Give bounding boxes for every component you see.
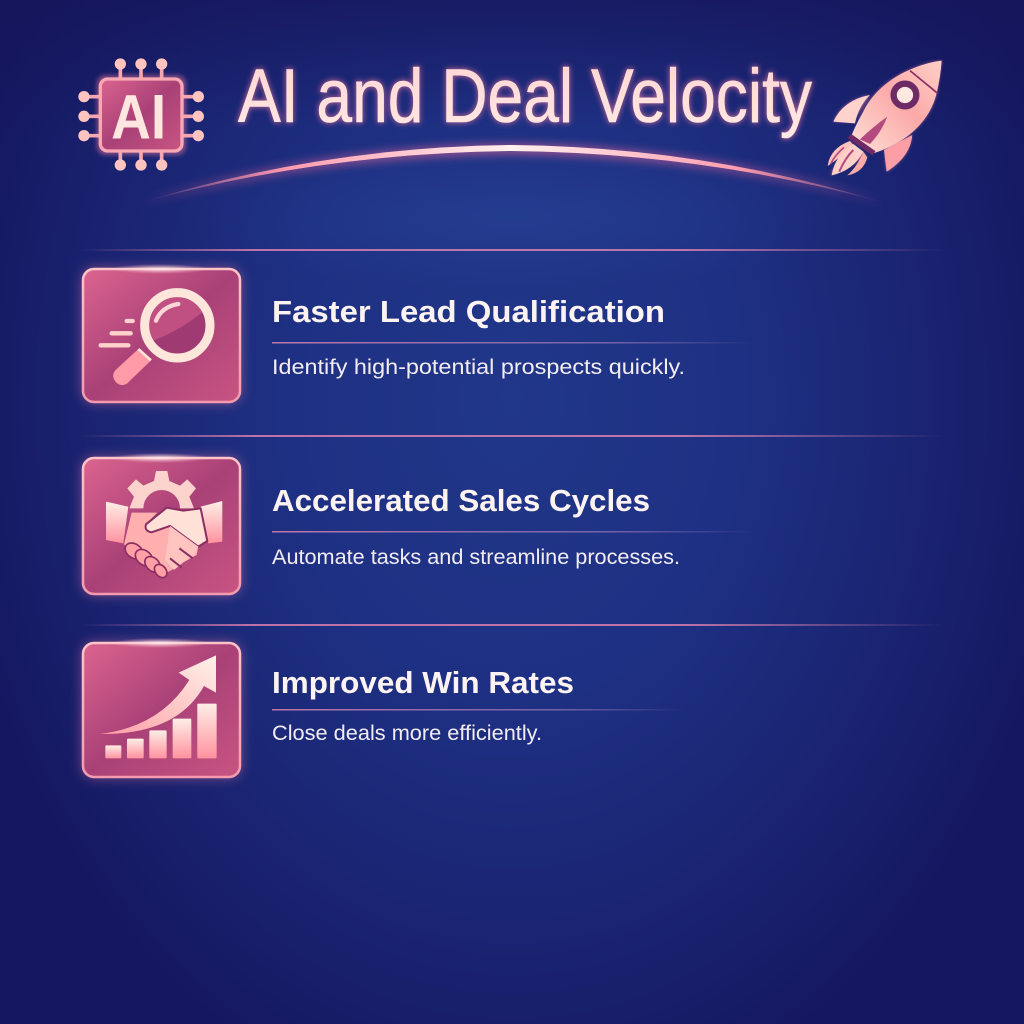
description: sales cycles: Automate tasks and streamline processes. — [272, 546, 680, 569]
title: AI and Deal Velocity — [238, 54, 812, 139]
heading: improved win rates: Improved Win Rates — [272, 665, 574, 700]
panel: improved win rates — [82, 638, 684, 778]
heading: accelerated sales cycles: Accelerated Sales Cycles — [272, 483, 650, 518]
description: lead qualification: Identify high-potential prospects quickly. — [272, 356, 685, 379]
icon: growth chart card — [82, 638, 241, 778]
headline arc — [140, 145, 885, 203]
icon: magnifying glass card — [82, 264, 241, 403]
icon: handshake and gear card — [82, 453, 241, 595]
panel: faster lead qualification — [82, 264, 756, 403]
description: win rates: Close deals more efficiently. — [272, 722, 542, 745]
icon: AI chip — [78, 58, 204, 171]
icon: rocket — [828, 61, 942, 175]
panel: accelerated sales cycles — [82, 453, 756, 595]
icon: AI chip: AI — [111, 82, 166, 152]
title: AI and Deal Velocity — [238, 54, 812, 139]
heading: faster lead qualification: Faster Lead Qualification — [272, 294, 665, 329]
